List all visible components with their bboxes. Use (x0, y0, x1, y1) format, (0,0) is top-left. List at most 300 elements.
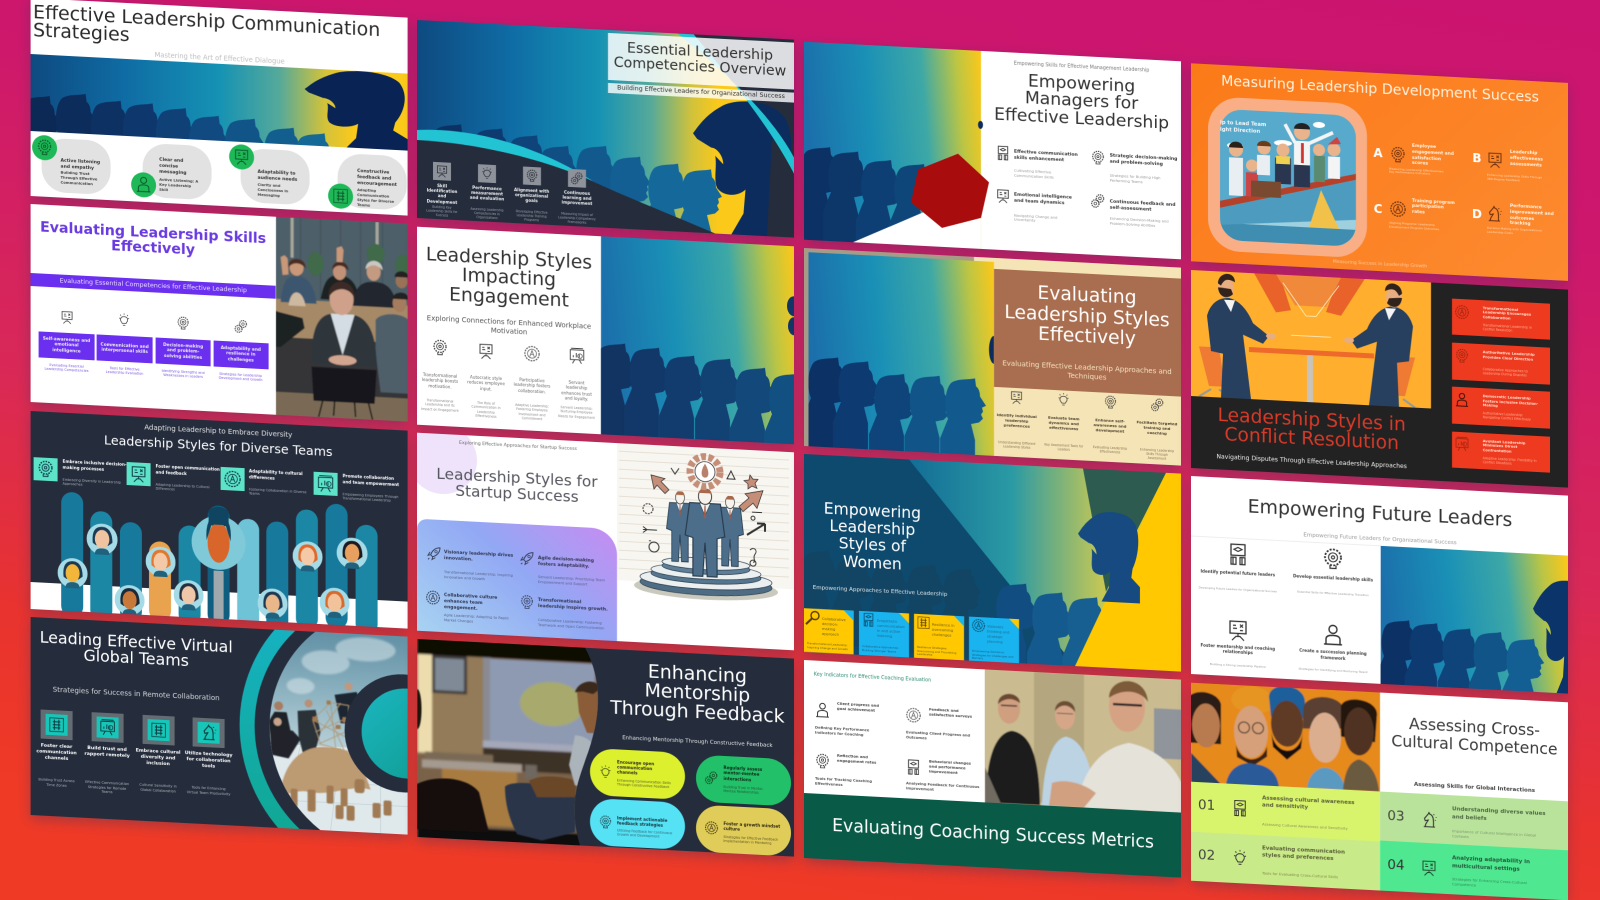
column 2 text: Teams (102, 790, 113, 794)
card 2 heading: messaging (159, 170, 187, 176)
competency box 4 (213, 341, 268, 370)
item 4 heading: Promote collaboration (343, 474, 394, 481)
note 2: Tools for Effective (110, 366, 140, 371)
item 2 text: Empowerment and Support (538, 580, 587, 587)
item 3 text: Tools for Tracking Coaching (815, 777, 872, 784)
card 2 text: Empathetic (877, 619, 898, 624)
column 4 text: Measuring Impact of (561, 211, 593, 217)
item 1 text: Transformational Leadership: Inspiring (444, 570, 513, 578)
header: Empowering Skills for Effective Management Leadership (1014, 62, 1149, 74)
illustration: concentric circles with chess network photo (239, 630, 408, 835)
item 4 text: Teamwork and Open Communication (538, 623, 604, 630)
card 4 text (357, 188, 394, 207)
header: Adapting Leadership to Embrace Diversity (144, 423, 292, 439)
column 2 text: Autocratic style (470, 374, 502, 381)
item C heading: rates (1412, 210, 1425, 216)
icon 3 (995, 188, 1011, 204)
card 1 text: Building Trust (61, 171, 90, 176)
icon tile 3 (142, 714, 175, 746)
icon C (1389, 200, 1407, 219)
card 3 text: Clarity and (258, 183, 280, 188)
panel: slide Leadership Styles Impacting Engagement (417, 227, 794, 444)
item C heading: participation (1412, 204, 1444, 211)
column 1 note: Impact on Engagement (421, 407, 459, 413)
title: Leadership Styles in (1218, 405, 1406, 435)
item 4 text: Improvement (906, 786, 934, 792)
icon badge 3 (228, 144, 254, 170)
card 3 heading (257, 169, 298, 183)
card 4 text: Adapting (357, 188, 376, 193)
item 1 text (815, 726, 869, 738)
card 2 heading (1483, 350, 1535, 362)
column 4 heading: improvement (562, 200, 592, 207)
item 3 text: Effectiveness (815, 782, 843, 787)
column 1 note: Transformational (427, 398, 453, 404)
subtitle: Exploring Connections for Enhanced Workplace (427, 314, 591, 330)
item 02 text: Tools for Evaluating Cross-Cultural Skills (1262, 870, 1338, 879)
item A text: Measuring Leadership Effectiveness: (1389, 166, 1444, 173)
item 3 heading: Foster mentorship and coaching (1201, 642, 1275, 651)
column 1 heading: preferences (1004, 422, 1030, 429)
icon A (1389, 146, 1407, 165)
item 2 text: Evaluating Client Progress and (906, 730, 970, 737)
column 3 text: collaboration. (518, 388, 546, 394)
band 2 (1191, 832, 1380, 892)
title: Conflict Resolution (1224, 424, 1399, 454)
card 1 text: Transformational Leadership in (1483, 323, 1532, 330)
subtitle bar: Evaluating Essential Competencies for Effective Leadership (60, 278, 247, 294)
item 1 heading: Effective communication (1014, 149, 1078, 158)
item 3 text (444, 613, 508, 626)
item 2 heading: Agile decision-making (538, 556, 594, 564)
column 3 text (514, 377, 550, 395)
panel: slide Enhancing Mentorship Through Feedback (417, 639, 794, 857)
subtitle: Empowering Approaches to Effective Leadership (813, 584, 947, 597)
icon 1 (805, 609, 820, 625)
item D text (1487, 227, 1542, 237)
card 3 heading: Making (1483, 403, 1498, 408)
item D heading: Performance (1510, 204, 1542, 211)
column 3 text (1093, 445, 1127, 455)
item 1 heading: Client progress and (837, 701, 879, 708)
item 3 heading (1201, 642, 1275, 657)
item B text (1487, 174, 1542, 184)
item 3 text (1014, 213, 1057, 225)
title (436, 466, 598, 506)
column 3 heading: Embrace cultural (136, 748, 181, 756)
header: Key Indicators for Effective Coaching Evaluation (814, 672, 931, 684)
item 4 heading (929, 758, 971, 776)
pill 3 text: Growth and Development (617, 832, 659, 839)
item 4 heading (538, 598, 608, 613)
subtitle (1002, 359, 1172, 386)
card 2 text: Active Listening: A (159, 178, 198, 184)
card 4 (969, 617, 1019, 663)
item 1 heading: skills enhancement (1014, 155, 1064, 163)
card 1 note: Inspiring Change and Growth (807, 645, 848, 651)
icon 4 (704, 820, 719, 836)
subtitle: Strategies for Success in Remote Collaboration (53, 684, 220, 702)
card 4 text: planning (987, 640, 1003, 644)
column 4 text: Frameworks (568, 220, 586, 225)
icon 3 (1454, 392, 1470, 409)
column 2 heading: Performance (472, 185, 502, 191)
panel: slide Evaluating Leadership Skills Effectively (31, 204, 408, 422)
pill 4 text (724, 835, 778, 846)
card 3 text: Messaging (258, 193, 280, 198)
column 3 note: Adaptive Leadership: (515, 403, 549, 409)
column 4 heading: Facilitate targeted (1137, 419, 1177, 426)
item 1 heading (837, 701, 879, 713)
subtitle bar: Building Effective Leaders for Organizational Success (617, 84, 785, 100)
subtitle: Empowering Future Leaders for Organizational Success (1303, 532, 1457, 546)
pill 4 heading: culture (724, 826, 740, 832)
card 3 text (1483, 411, 1531, 422)
note 1: Leadership Competencies (45, 367, 89, 373)
column 2 text (467, 374, 505, 392)
gradient card (417, 519, 617, 644)
note 3: Weaknesses in Leaders (163, 373, 203, 379)
pill 4 (696, 804, 791, 856)
column 3 note: Commitment (522, 416, 542, 421)
item 2 heading (155, 464, 220, 476)
title: Effectively (111, 238, 195, 259)
number 02: 02 (1198, 847, 1215, 864)
item 4 heading: leadership inspires growth. (538, 604, 608, 612)
column 1 text: Time Zones (46, 782, 67, 787)
item 2 heading (929, 706, 972, 719)
pill 2 heading (724, 765, 762, 783)
column 3 note: Fostering Employee (516, 407, 548, 413)
item 4 text: Enhancing Decision-Making and (1110, 217, 1169, 224)
item 3 text: Teams (249, 492, 260, 496)
icon 3 (916, 615, 931, 631)
item 2 text: Strategies for Building High (1110, 174, 1161, 181)
card background 4 (338, 153, 407, 211)
item 3 heading: Collaborative culture (444, 593, 497, 601)
title: Evaluating Leadership Skills (40, 219, 266, 247)
card 1 heading: Collaboration (1483, 315, 1511, 320)
item B heading: assessments (1510, 161, 1542, 168)
column 4 heading: learning and (562, 195, 592, 201)
item 04 heading: Analyzing adaptability in (1452, 856, 1530, 866)
column 2 heading (1048, 415, 1080, 431)
item D heading: tracking (1510, 221, 1531, 227)
title (426, 245, 592, 312)
panel: slide Empowering Managers for Effective Leadership (804, 42, 1181, 259)
title: Styles of (839, 534, 906, 556)
column 2 heading: measurement (471, 190, 503, 197)
title: Effective Leadership (994, 104, 1169, 133)
icon badge 1 (32, 135, 58, 160)
illustration: crowd silhouettes on gradient (1191, 476, 1568, 694)
icon 3 (598, 814, 613, 830)
card 4 heading: Confrontation (1483, 448, 1512, 453)
title (614, 40, 786, 80)
column 1 heading (427, 182, 457, 205)
card 4 note (972, 650, 1014, 663)
card 4 text: thinking and (987, 630, 1010, 635)
icon 3 (814, 752, 830, 770)
icon 2 (704, 770, 719, 786)
letter A: A (1373, 146, 1383, 160)
illustration text (1220, 120, 1300, 139)
column 1 text (426, 204, 458, 218)
title: Women (843, 552, 902, 573)
column 1 text: motivation. (428, 383, 452, 389)
icon 2 (119, 313, 130, 326)
title: Empowering Future Leaders (1248, 495, 1512, 531)
item 2 heading: Strategic decision-making (1110, 154, 1177, 163)
item A heading: Employee (1412, 144, 1436, 150)
item 3 heading: engagement. (444, 605, 478, 611)
column 2 heading (470, 185, 504, 202)
letter C: C (1374, 202, 1382, 216)
pill 1 heading: communication (617, 764, 652, 771)
column 1 heading: Foster clear (41, 744, 72, 750)
icon 4 (1454, 436, 1470, 453)
column 2 text (85, 780, 129, 796)
title: Effective Leadership Communication (33, 1, 380, 41)
subtitle: Mastering the Art of Effective Dialogue (155, 51, 285, 66)
card 1 text (60, 171, 98, 186)
item 3 heading (1014, 193, 1072, 208)
item 03 text: Importance of Cultural Intelligence in Global (1452, 828, 1536, 838)
column 1 heading: Development (427, 198, 457, 205)
column 3 heading: diversity and (141, 755, 175, 762)
item 1 heading (444, 550, 513, 566)
note 4: Development and Growth (219, 376, 262, 382)
column 1 text: Building Key (432, 205, 452, 210)
item 2 text (1110, 174, 1161, 186)
column 4 text: Virtual Team Productivity (187, 790, 230, 796)
icon 1 (1226, 542, 1250, 567)
card 2 text: Leadership During Disputes (1483, 371, 1527, 378)
item 1 text (444, 570, 513, 584)
icon 1 (426, 545, 442, 562)
note 3 (162, 368, 205, 379)
column 3 text (139, 783, 177, 794)
column 4 text (558, 211, 596, 226)
card 1 heading (1483, 306, 1531, 322)
subtitle: Motivation (491, 326, 527, 336)
column 1 text: Building Trust Across (38, 777, 75, 783)
icon 3 (1226, 618, 1250, 643)
column 2 text: Strategies for Remote (88, 785, 126, 791)
icon 3 (1102, 395, 1118, 410)
card 3 note (917, 646, 956, 659)
item 04 heading (1452, 856, 1530, 875)
panel: slide Empowering Leadership Styles of Women (804, 454, 1181, 672)
item 3 heading (444, 593, 497, 613)
item 4 text: Analyzing Feedback for Continuous (906, 781, 979, 789)
icon 2 (478, 164, 496, 183)
number 04: 04 (1387, 857, 1405, 874)
pill 3 text (617, 828, 672, 840)
column 4 text: Leadership Competency (558, 215, 596, 221)
item A text (1389, 167, 1444, 178)
column 4 heading (1137, 419, 1177, 436)
column 4 note (558, 405, 595, 420)
pill 2 heading: interactions (724, 776, 751, 782)
illustration: crowd silhouettes with red hexagon (804, 42, 1181, 259)
pill 2 heading: Regularly assess (724, 765, 762, 772)
illustration: two businessmen negotiating at table (1191, 270, 1568, 488)
card 2 heading: Clear and (159, 158, 183, 164)
column 4 note: Needs for Engagement (558, 414, 595, 420)
icon 4 (568, 347, 586, 365)
illustration text: ip to Lead Team (1220, 120, 1266, 128)
item 01 heading (1262, 795, 1354, 815)
competency box 4: challenges (228, 358, 254, 364)
column 4 heading: tools (202, 764, 215, 770)
column 4 heading: Continuous (564, 190, 590, 196)
icon tile 4 (192, 718, 225, 748)
item 1 text: Communication Skills (1014, 174, 1054, 180)
icon tile 3 (220, 467, 244, 491)
competency box 3: and problem- (167, 349, 199, 355)
item 3 heading: Adaptability to cultural (249, 469, 303, 477)
card 1 text (1483, 323, 1532, 334)
column 4 text: enhances trust (561, 390, 592, 397)
panel: slide Evaluating Leadership Styles Effectively (804, 248, 1181, 466)
card 3 heading (1483, 394, 1538, 411)
item 3 text: Fostering Collaboration in Diverse (249, 487, 307, 494)
column 2 text (1044, 442, 1083, 453)
icon B (1486, 151, 1504, 170)
column 2 note (471, 401, 501, 420)
item 2 heading: Develop essential leadership skills (1293, 573, 1373, 582)
item 4 heading: Create a succession planning (1299, 648, 1367, 656)
item 3 text: Navigating Change and (1014, 213, 1057, 219)
column 1 heading: Identification (427, 188, 457, 194)
title: Leading Effective Virtual (40, 627, 233, 657)
item 3 heading (248, 468, 303, 480)
item 03 heading (1452, 807, 1546, 827)
band 4 (1380, 841, 1568, 900)
column 2 text: Organizations (476, 215, 498, 220)
card 3 text (932, 623, 955, 639)
card 2 text (159, 178, 198, 192)
item 03 heading: and beliefs (1452, 814, 1487, 822)
title: Leadership Styles for Diverse Teams (104, 433, 333, 459)
competency box 1: emotional (54, 343, 79, 349)
item D text: Decision Making with Organizational (1487, 226, 1542, 233)
column 1 text (38, 777, 75, 787)
subtitle: Enhancing Mentorship Through Constructive Feedback (622, 735, 773, 749)
column 4 heading: Utilize technology (185, 751, 232, 758)
card 3 heading: audience needs (258, 176, 297, 183)
pill 2 text: Building Trust in Mentor- (724, 785, 764, 791)
column 4 text: Servant (569, 380, 584, 385)
pill 1 heading (617, 759, 654, 777)
panel: slide Leadership Styles for Diverse Teams (31, 411, 408, 629)
item 3 text: Market Changes (444, 618, 473, 623)
item 01 heading: and sensitivity (1262, 803, 1308, 811)
item 3 text: Building a Strong Leadership Pipeline (1210, 662, 1266, 669)
icon 04 (1420, 859, 1438, 878)
icon 4 (1150, 397, 1164, 413)
red card 1 (1452, 298, 1550, 340)
title band (994, 269, 1181, 397)
item 1 text: Embracing Diversity in Leadership (63, 478, 121, 485)
title: Evaluating (1037, 282, 1137, 309)
icon 1 (1009, 390, 1024, 405)
card 4 heading: feedback and (357, 175, 391, 182)
icon 1 (995, 145, 1011, 161)
card 2 text (1483, 367, 1528, 378)
column 1 heading: communication (36, 749, 77, 756)
pill 3 heading: Implement actionable (617, 815, 667, 823)
column 4 note: Nurturing Employee (560, 410, 593, 415)
item 04 text: Competence (1452, 881, 1476, 888)
card 3 text: Conciseness in (258, 188, 288, 193)
item 4 text (342, 492, 399, 503)
item 2 heading (1110, 154, 1177, 170)
icon 1 (814, 701, 830, 719)
column 1 heading: Identify individual (997, 412, 1037, 419)
note 3: Identifying Strengths and (162, 368, 205, 375)
icon D (1485, 205, 1503, 224)
column 2 heading: Build trust and (87, 746, 127, 753)
note 1 (44, 362, 89, 373)
item 2 heading: and problem-solving (1110, 160, 1163, 168)
card 1 (804, 608, 854, 655)
card 2 heading: concise (159, 164, 178, 170)
column 4 note: Servant Leadership: (560, 405, 593, 411)
title: Impacting (462, 265, 556, 291)
card 3 text: overcoming (932, 628, 953, 633)
column 1 text: leadership boosts (422, 377, 458, 384)
column 2 note: The Role of (477, 401, 495, 406)
card background 2 (143, 143, 212, 200)
card 2 note (862, 645, 899, 654)
card 2 heading: Provides Clear Direction (1483, 355, 1533, 361)
card 1 text: Conflict Resolution (1483, 327, 1512, 333)
card 1 note (807, 642, 848, 651)
item C text: Aligning Programs: Leadership (1389, 221, 1435, 227)
icon 1 (431, 338, 449, 357)
icon tile 4 (314, 472, 338, 496)
title: Assessing Cross- (1409, 714, 1540, 739)
column 1 text: Transformational (423, 372, 457, 379)
competency box 3: Decision-making (163, 343, 203, 350)
title (1004, 282, 1170, 352)
icon 3 (177, 316, 189, 330)
title: Global Teams (83, 646, 189, 670)
column 3 text: Effectiveness (1100, 449, 1120, 455)
title: Evaluating Coaching Success Metrics (832, 816, 1154, 853)
photo: five diverse people (1191, 683, 1568, 900)
item 4 heading: Behavioral changes (929, 758, 971, 766)
icon badge 2 (130, 172, 156, 198)
letter D: D (1472, 207, 1482, 222)
item 1 text: Defining Key Performance (815, 726, 869, 732)
panel: slide Assessing Cross-Cultural Competence (1191, 683, 1568, 900)
pill 3 text: Utilizing Feedback for Continuous (617, 828, 672, 835)
icon tile 2 (92, 712, 124, 743)
title: Essential Leadership (627, 40, 773, 64)
competency box 2: interpersonal skills (101, 348, 148, 355)
column 2 note: Effectiveness (475, 414, 497, 419)
photo: three men in discussion (804, 660, 1181, 878)
panel: slide Leadership Styles in Conflict Resolution (1191, 270, 1568, 488)
item 1 heading (62, 459, 127, 471)
item 1 text (1014, 169, 1054, 181)
illustration: diverse people in pill shapes (30, 492, 408, 629)
item D heading (1510, 204, 1554, 229)
illustration text: ight Direction (1220, 127, 1260, 135)
